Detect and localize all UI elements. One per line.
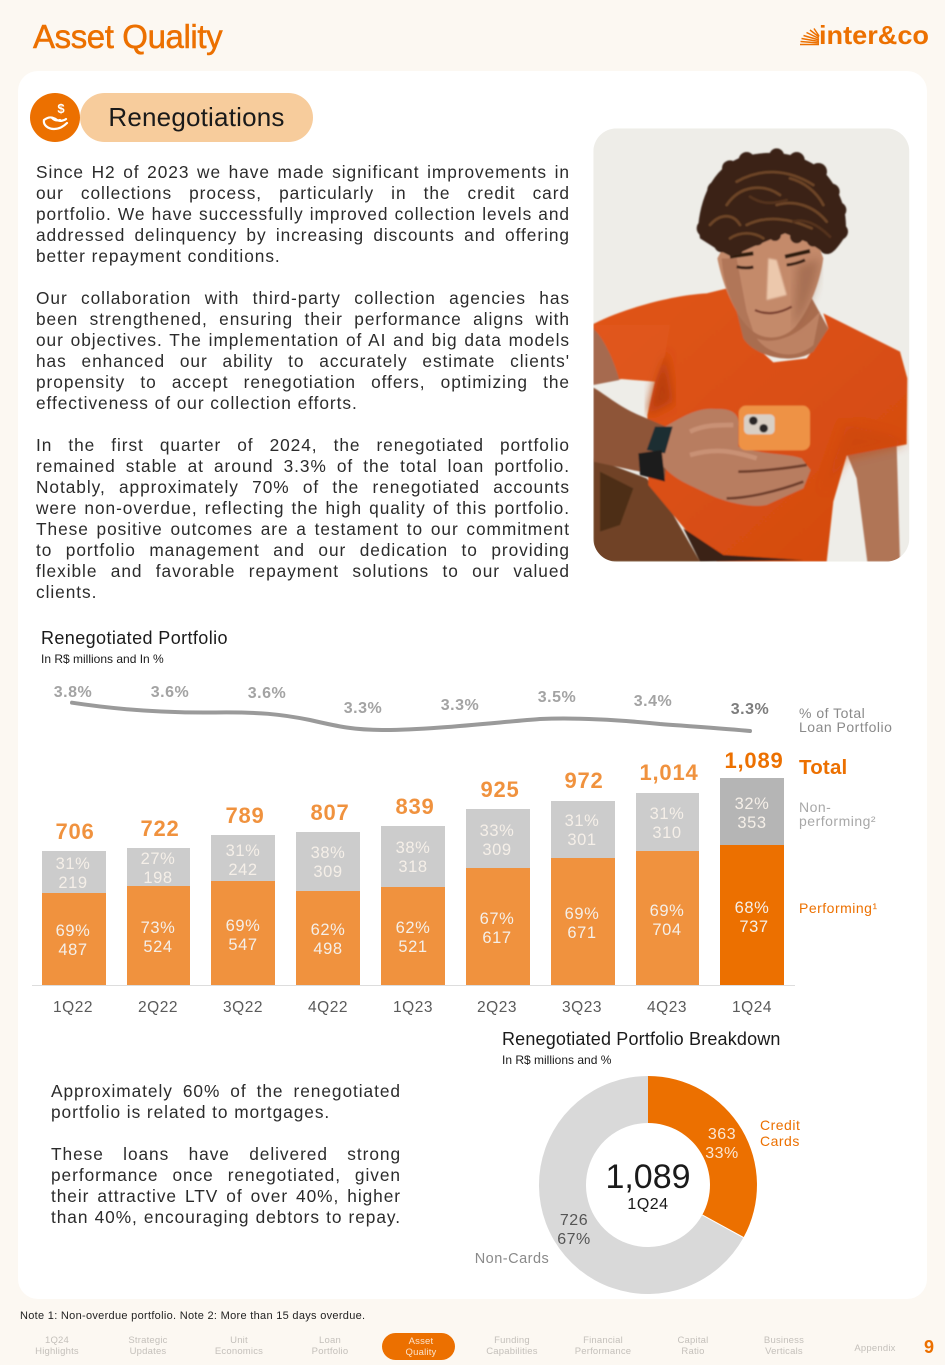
donut chart: Non-Cards	[475, 1251, 549, 1267]
navigation bar	[35, 1333, 934, 1360]
bar value labels: 31%	[650, 805, 684, 823]
right arm	[847, 445, 900, 562]
bar totals: 972	[564, 768, 604, 793]
title: Asset Quality	[33, 18, 222, 55]
donut chart: 363	[708, 1126, 736, 1143]
navigation bar: Funding	[494, 1335, 530, 1346]
text: main body: were non-overdue, reflecting the high quality of this portfolio.	[36, 498, 570, 518]
bar value labels: 242	[228, 861, 258, 879]
phone	[739, 406, 810, 450]
bar value labels: 69%	[565, 905, 599, 923]
text: main body: to portfolio management and our dedication to providing	[36, 540, 570, 560]
line chart: % of total loan portfolio: 3.3%	[731, 701, 769, 718]
bar value labels: 32%	[735, 795, 769, 813]
bar value labels: 547	[228, 936, 258, 954]
line chart: % of total loan portfolio: 3.3%	[441, 697, 479, 714]
navigation bar: Quality	[406, 1347, 436, 1358]
bar value labels: 219	[58, 874, 88, 892]
legend: Total	[799, 756, 847, 779]
subheading: breakdown units: In R$ millions and %	[502, 1053, 611, 1067]
bar value labels	[56, 795, 769, 959]
axis labels: 2Q22	[138, 999, 178, 1016]
bar totals: 1,014	[639, 760, 699, 785]
donut chart: 1Q24	[627, 1196, 669, 1213]
line chart: % of total loan portfolio: 3.8%	[54, 684, 92, 701]
bar totals	[55, 748, 784, 844]
bar value labels: 68%	[735, 899, 769, 917]
hair	[697, 148, 848, 257]
bar value labels: 301	[567, 831, 597, 849]
bar value labels: 309	[313, 863, 343, 881]
bar value labels: 737	[739, 918, 769, 936]
text: main body: our objectives. The implementation of AI and big data models	[36, 330, 570, 350]
navigation bar: Strategic	[128, 1335, 168, 1346]
bar value labels: 27%	[141, 850, 175, 868]
bar totals: 807	[310, 800, 350, 825]
bar totals: 789	[225, 803, 265, 828]
bar value labels: 521	[398, 938, 428, 956]
neck	[737, 295, 828, 359]
bar value labels: 73%	[141, 919, 175, 937]
bar totals: 839	[395, 794, 435, 819]
donut chart: 67%	[557, 1231, 591, 1248]
navigation bar: Loan	[319, 1335, 341, 1346]
line chart: % of total loan portfolio: 3.6%	[151, 684, 189, 701]
axis labels: 4Q22	[308, 999, 348, 1016]
bar value labels: 487	[58, 941, 88, 959]
text: main body: propensity to accept renegotiation offers, optimizing the	[36, 372, 570, 392]
bars: performing	[42, 845, 784, 985]
text: mortgages note: performance once renegotiated, given	[51, 1165, 401, 1185]
text: main body: Since H2 of 2023 we have made significant improvements in	[36, 162, 570, 182]
text: main body: has enhanced our ability to accurately estimate clients'	[36, 351, 570, 371]
bar chart: renegotiated portfolio	[32, 684, 892, 1016]
text: main body: our collections process, particularly in the credit card	[36, 183, 570, 203]
navigation bar: Economics	[215, 1346, 263, 1357]
navigation bar: Portfolio	[312, 1346, 348, 1357]
navigation bar: Unit	[230, 1335, 248, 1346]
navigation bar: Performance	[575, 1346, 631, 1357]
bars: non-performing	[42, 778, 784, 893]
axis labels: 1Q23	[393, 999, 433, 1016]
text: main body: effectiveness of our collection efforts.	[36, 393, 358, 413]
legend: performing²	[799, 813, 876, 829]
bar totals: 925	[480, 777, 520, 802]
text: mortgages note: their attractive LTV of over 40%, higher	[51, 1186, 401, 1206]
bar value labels: 69%	[226, 917, 260, 935]
section heading: Renegotiations: Renegotiations	[108, 102, 285, 132]
text: main body: Notably, approximately 70% of the renegotiated accounts	[36, 477, 570, 497]
bar value labels: 38%	[396, 839, 430, 857]
text: main body: better repayment conditions.	[36, 246, 281, 266]
donut chart: Cards	[760, 1133, 800, 1149]
axis labels	[53, 999, 772, 1016]
navigation bar: Capital	[678, 1335, 708, 1346]
line chart: % of total loan portfolio	[54, 684, 769, 731]
navigation bar: Updates	[130, 1346, 166, 1357]
navigation bar: 1Q24	[45, 1335, 69, 1346]
bar value labels: 309	[482, 841, 512, 859]
navigation bar: Business	[764, 1335, 804, 1346]
donut chart	[475, 1076, 800, 1294]
forearm	[593, 388, 670, 478]
text: mortgages note	[51, 1081, 401, 1227]
axis labels: 2Q23	[477, 999, 517, 1016]
donut chart: 33%	[705, 1145, 739, 1162]
bar value labels: 704	[652, 921, 682, 939]
navigation bar: Financial	[583, 1335, 623, 1346]
watch	[647, 427, 673, 453]
axis labels: 3Q22	[223, 999, 263, 1016]
bar totals: 1,089	[724, 748, 784, 773]
navigation bar: Verticals	[765, 1346, 803, 1357]
hand	[660, 409, 811, 506]
text: main body: been strengthened, ensuring their performance aligns with	[36, 309, 570, 329]
bar value labels: 498	[313, 940, 343, 958]
navigation bar: Capabilities	[486, 1346, 538, 1357]
axis labels: 4Q23	[647, 999, 687, 1016]
subheading: units: In R$ millions and In %	[41, 652, 164, 666]
line chart: % of total loan portfolio: 3.5%	[538, 689, 576, 706]
bar value labels: 353	[737, 814, 767, 832]
text: main body: addressed delinquency by increasing discounts and offering	[36, 225, 570, 245]
donut chart: 726	[560, 1212, 588, 1229]
text: main body: Our collaboration with third-party collection agencies has	[36, 288, 570, 308]
bar value labels: 31%	[226, 842, 260, 860]
text: main body: clients.	[36, 582, 97, 602]
bar value labels: 671	[567, 924, 597, 942]
navigation bar: Ratio	[681, 1346, 705, 1357]
text: main body: remained stable at around 3.3% of the total loan portfolio.	[36, 456, 570, 476]
upper arm	[593, 328, 619, 385]
text: mortgages note: than 40%, encouraging debtors to repay.	[51, 1207, 401, 1227]
shirt	[593, 288, 907, 562]
legend: Loan Portfolio	[799, 719, 892, 735]
bar totals: 706	[55, 819, 95, 844]
bar value labels: 69%	[650, 902, 684, 920]
text: mortgages note: Approximately 60% of the renegotiated	[51, 1081, 401, 1101]
bar value labels: 310	[652, 824, 682, 842]
bar value labels: 62%	[311, 921, 345, 939]
heading: Renegotiated Portfolio Breakdown: Renegotiated Portfolio Breakdown	[502, 1029, 781, 1049]
navigation bar: Asset	[409, 1336, 433, 1347]
text: main body: In the first quarter of 2024, the renegotiated portfolio	[36, 435, 570, 455]
bar totals: 722	[140, 816, 180, 841]
line chart: % of total loan portfolio: 3.3%	[344, 700, 382, 717]
bar value labels: 31%	[565, 812, 599, 830]
bar value labels: 38%	[311, 844, 345, 862]
legend: Non-	[799, 799, 831, 815]
text: main body: These positive outcomes are a testament to our commitment	[36, 519, 570, 539]
pants	[593, 458, 700, 562]
legend	[799, 705, 892, 916]
text: main body: portfolio. We have successfully improved collection levels and	[36, 204, 570, 224]
text: mortgages note: portfolio is related to mortgages.	[51, 1102, 330, 1122]
bar value labels: 62%	[396, 919, 430, 937]
bar value labels: 31%	[56, 855, 90, 873]
axis labels: 3Q23	[562, 999, 602, 1016]
navigation bar: Appendix	[854, 1343, 896, 1354]
navigation bar: 9	[924, 1337, 934, 1357]
legend: % of Total	[799, 705, 865, 721]
heading: Renegotiated Portfolio: Renegotiated Portfolio	[41, 628, 228, 648]
donut chart: 1,089	[605, 1158, 691, 1196]
axis labels: 1Q24	[732, 999, 772, 1016]
bar value labels: 318	[398, 858, 428, 876]
face	[717, 232, 823, 337]
bar value labels: 617	[482, 929, 512, 947]
bar value labels: 33%	[480, 822, 514, 840]
bar value labels: 69%	[56, 922, 90, 940]
navigation bar: Highlights	[35, 1346, 79, 1357]
text: main body: flexible and favorable repayment solutions to our valued	[36, 561, 570, 581]
icon: hand with coin	[30, 93, 80, 142]
line chart: % of total loan portfolio: 3.4%	[634, 693, 672, 710]
bar value labels: 524	[143, 938, 173, 956]
icon: hand with coin: $	[57, 101, 65, 116]
bar value labels: 67%	[480, 910, 514, 928]
text: mortgages note: These loans have delivered strong	[51, 1144, 401, 1164]
legend: Performing¹	[799, 900, 878, 916]
footnote: Note 1: Non-overdue portfolio. Note 2: More than 15 days overdue.	[20, 1310, 365, 1322]
axis labels: 1Q22	[53, 999, 93, 1016]
photo: young man looking at phone	[593, 128, 910, 562]
donut chart: Credit	[760, 1117, 800, 1133]
text: main body	[36, 162, 570, 602]
section heading: Renegotiations	[80, 93, 313, 142]
bar value labels: 198	[143, 869, 173, 887]
line chart: % of total loan portfolio: 3.6%	[248, 685, 286, 702]
